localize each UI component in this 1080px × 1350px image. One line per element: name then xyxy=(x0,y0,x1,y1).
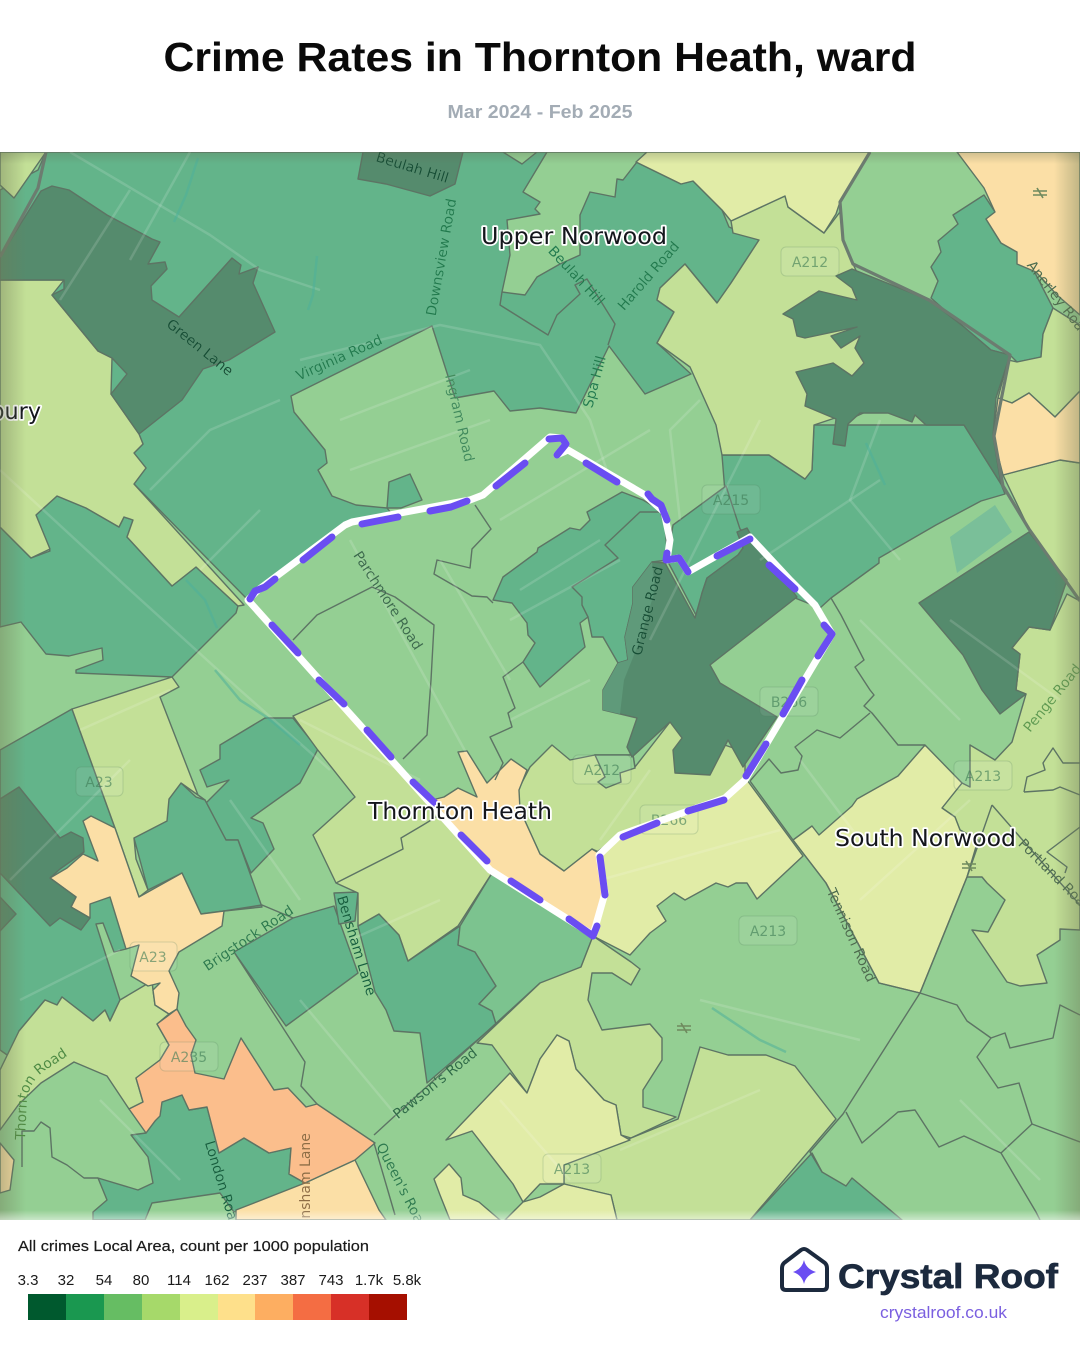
road number badges: A23 xyxy=(139,950,167,966)
wordmark: Crystal Roof xyxy=(838,1258,1059,1296)
water features xyxy=(174,158,885,1052)
map area: orange high-crime zone xyxy=(129,1009,375,1183)
website: crystalroof.co.uk xyxy=(880,1304,1008,1322)
map areas: transitional green zones xyxy=(458,873,593,1024)
road labels: Ingram Road xyxy=(441,373,477,463)
road labels: Beulah Hill xyxy=(374,150,450,187)
road labels: Thornton Road xyxy=(14,1047,67,1140)
road number badges: A215 xyxy=(713,493,749,509)
legend title: All crimes Local Area, count per 1000 population xyxy=(18,1238,369,1255)
road number badges xyxy=(76,247,1012,1183)
legend scale labels: 162 xyxy=(204,1272,230,1289)
map areas: dark green lowest-crime zones xyxy=(0,152,1067,930)
road number badges: B266 xyxy=(651,813,687,829)
legend colour bar xyxy=(28,1294,407,1320)
road number badges: A212 xyxy=(584,763,620,779)
legend scale labels: 80 xyxy=(133,1272,149,1289)
road number badges: A213 xyxy=(965,769,1001,785)
road labels: Grange Road xyxy=(629,565,667,657)
road labels: Tennison Road xyxy=(822,885,878,985)
subtitle: date range: Mar 2024 - Feb 2025 xyxy=(448,102,632,122)
road labels: Green Lane xyxy=(163,316,236,380)
purple dashes xyxy=(250,438,832,936)
map areas: peach higher-crime zones xyxy=(0,152,1080,1220)
ward boundary: Thornton Heath xyxy=(248,437,832,936)
map edge vignette xyxy=(0,152,1080,1220)
thick borough boundary lines xyxy=(0,152,1080,601)
place labels: South Norwood xyxy=(835,826,1016,852)
map area: small light patch near A212 xyxy=(595,755,635,788)
legend scale labels: 387 xyxy=(280,1272,306,1289)
road labels: Harold Road xyxy=(615,239,683,314)
road labels: Downsview Road xyxy=(424,197,460,317)
road number badges: A235 xyxy=(171,1050,207,1066)
road labels: Pawson's Road xyxy=(390,1045,481,1123)
road labels: Queen's Road xyxy=(372,1140,431,1234)
white ward outline xyxy=(248,437,832,935)
road labels: Virginia Road xyxy=(294,332,385,384)
place labels: Thornton Heath xyxy=(367,799,552,825)
title: Crime Rates in Thornton Heath, ward xyxy=(164,34,916,80)
legend scale labels: 114 xyxy=(167,1272,191,1289)
map area: lighter strip of dark zone beside Grange Road xyxy=(603,562,655,714)
legend scale labels: 743 xyxy=(318,1272,344,1289)
rail station icons xyxy=(677,188,1047,1033)
legend scale labels xyxy=(18,1272,422,1289)
road number badges: A212 xyxy=(792,255,828,271)
map area: teal park patch xyxy=(950,505,1012,573)
map areas: yellow-green zones xyxy=(0,152,1080,1220)
road labels: Beulah Hill xyxy=(544,243,607,309)
road number badges: A213 xyxy=(554,1162,590,1178)
road number badges: A213 xyxy=(750,924,786,940)
logo: Crystal Roof xyxy=(782,1249,1059,1322)
road labels: Brigstock Road xyxy=(201,903,297,975)
legend scale labels: 32 xyxy=(58,1272,74,1289)
legend scale labels: 237 xyxy=(242,1272,268,1289)
map areas: light green patches xyxy=(502,152,647,295)
road labels: London Road xyxy=(201,1139,243,1231)
place labels: Upper Norwood xyxy=(481,224,667,250)
road labels: Parchmore Road xyxy=(350,549,425,653)
legend scale labels: 3.3 xyxy=(18,1272,38,1289)
road labels: Bensham Lane xyxy=(333,894,379,998)
map areas: mid-green low-crime zones xyxy=(0,152,1080,1220)
road network xyxy=(0,152,1060,1180)
ward and neighbourhood boundary lines xyxy=(22,279,1080,1220)
road labels: Spa Hill xyxy=(581,354,610,410)
place labels xyxy=(0,224,1016,852)
road number badges: A23 xyxy=(85,775,113,791)
icon: house with star xyxy=(782,1249,827,1290)
map areas: pale yellow zones xyxy=(434,152,978,1220)
road labels: Bensham Lane xyxy=(298,1133,314,1237)
legend xyxy=(18,1238,422,1320)
legend scale labels: 1.7k xyxy=(355,1272,384,1289)
road number badges: B266 xyxy=(771,695,807,711)
legend scale labels: 5.8k xyxy=(393,1272,422,1289)
legend scale labels: 54 xyxy=(96,1272,112,1289)
